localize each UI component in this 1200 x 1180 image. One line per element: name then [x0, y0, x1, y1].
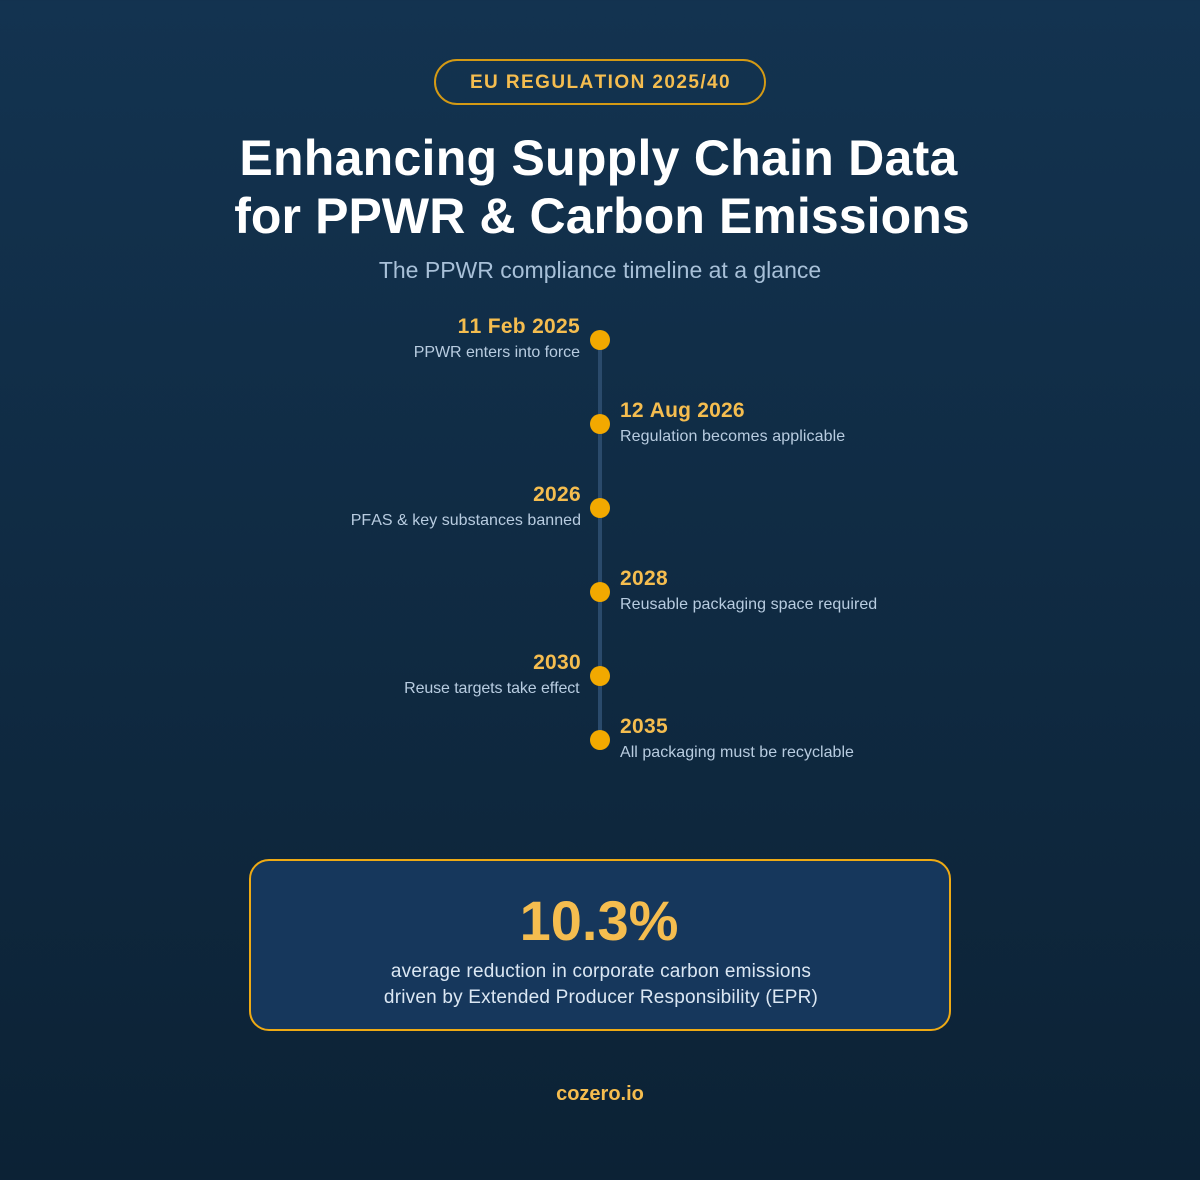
milestone: 2035: All packaging must be recyclable [620, 744, 854, 761]
milestone: 12 Aug 2026: Regulation becomes applicable [620, 428, 845, 445]
badge: EU REGULATION 2025/40 [470, 72, 731, 93]
stat panel [249, 859, 951, 1031]
milestone: 2026: 2026 [533, 483, 581, 506]
milestone: 2035: 2035 [620, 715, 668, 738]
milestone: 2030: Reuse targets take effect [404, 680, 580, 697]
milestone: 2026: PFAS & key substances banned [351, 512, 581, 529]
footer: cozero.io [556, 1083, 644, 1105]
stat description [384, 961, 818, 1008]
milestone: 2030 [404, 651, 610, 697]
stat value: 10.3% [520, 889, 678, 952]
milestone: 2026 [351, 483, 610, 529]
milestone: 11 Feb 2025 [414, 315, 610, 361]
milestone: 2028: Reusable packaging space required [620, 596, 877, 613]
title: Enhancing Supply Chain Data [239, 130, 958, 186]
milestone: 2028 [590, 567, 877, 613]
milestone: 12 Aug 2026: 12 Aug 2026 [620, 399, 745, 422]
milestone: 2030: 2030 [533, 651, 581, 674]
milestone: 2028: 2028 [620, 567, 668, 590]
stat description: average reduction in corporate carbon emissions [391, 961, 811, 982]
milestone: 11 Feb 2025: PPWR enters into force [414, 344, 580, 361]
stat description: driven by Extended Producer Responsibility (EPR) [384, 987, 818, 1008]
title: for PPWR & Carbon Emissions [234, 188, 970, 244]
subtitle: The PPWR compliance timeline at a glance [379, 257, 821, 283]
milestone: 2035 [590, 715, 854, 761]
title [234, 130, 970, 244]
timeline [351, 315, 877, 761]
timeline axis [598, 340, 602, 740]
milestone: 11 Feb 2025: 11 Feb 2025 [458, 315, 580, 338]
badge [434, 59, 766, 105]
milestone: 12 Aug 2026 [590, 399, 845, 445]
